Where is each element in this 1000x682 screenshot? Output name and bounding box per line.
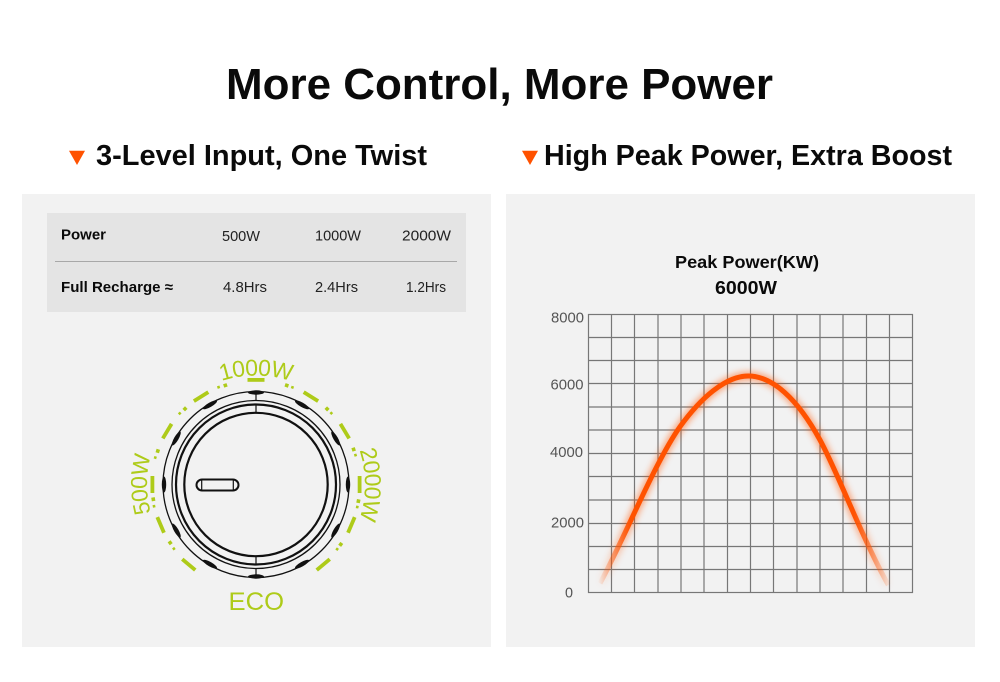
y axis labels: 6000 [550,376,584,394]
panel: input levels [22,194,491,647]
table: power and recharge times: Power [61,226,106,244]
table: power and recharge times: 1.2Hrs [406,279,446,296]
panel: peak power [506,194,975,647]
knob handle [196,480,238,490]
dial: knob diagram [130,360,381,616]
label: 1000W: 1000W [220,360,294,380]
label: 2000W: 2000W [360,448,381,523]
knob grip bumps [162,390,350,579]
y axis labels: 2000 [551,514,584,532]
table: power and recharge times: 1000W [315,228,362,244]
chart title: Peak Power(KW) [675,252,819,272]
table: power and recharge times: 2.4Hrs [315,279,358,296]
y axis labels: 0 [565,584,573,602]
heading: High Peak Power, Extra Boost: High Peak Power, Extra Boost [544,140,952,172]
label: ECO: ECO [228,588,284,616]
table: power and recharge times: Full Recharge ≈ [61,279,173,296]
label: 500W: 500W [130,452,150,514]
heading: 3-Level Input, One Twist: 3-Level Input, One Twist [96,140,427,172]
green scale ring [150,378,362,572]
table: power and recharge times [47,213,466,312]
table: power and recharge times: 500W [222,228,261,245]
y axis labels: 4000 [550,444,583,461]
y axis labels: 8000 [551,310,584,326]
table: power and recharge times: 2000W [402,228,452,244]
chart title: 6000W [715,277,778,298]
y axis labels [550,310,584,602]
icon: orange triangle right [522,151,538,165]
chart title [675,252,819,298]
title: More Control, More Power [226,60,773,109]
knob rings [163,392,349,578]
table: power and recharge times: 4.8Hrs [223,279,267,296]
line chart: peak power curve [588,314,912,592]
icon: orange triangle left [69,151,85,165]
